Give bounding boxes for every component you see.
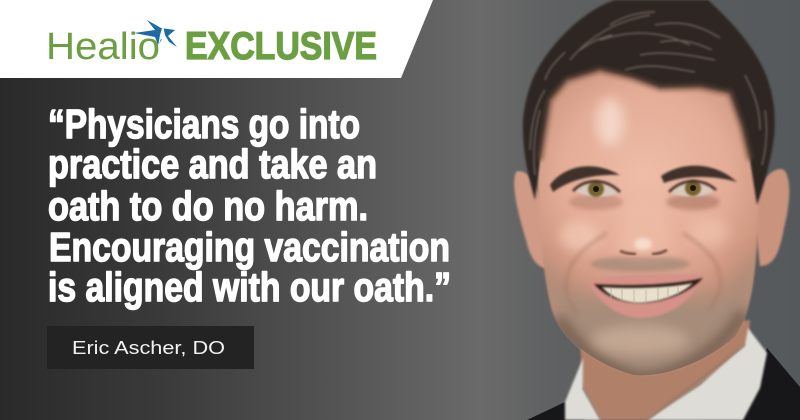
quote text: practice and take an	[48, 141, 377, 187]
shirt texture edge	[583, 345, 745, 420]
quote text: Encouraging vaccination	[49, 224, 450, 270]
white header banner	[0, 0, 433, 78]
quote text	[48, 101, 451, 310]
hair	[523, 0, 775, 205]
quote text: is aligned with our oath.”	[48, 264, 451, 310]
portrait photo of Eric Ascher	[514, 0, 800, 420]
quote text: “Physicians go into	[48, 101, 360, 147]
name plate: Eric Ascher, DO	[72, 337, 225, 358]
right ear	[752, 169, 789, 266]
left eye	[573, 181, 620, 197]
shirt collar	[565, 328, 767, 420]
Healio wordmark: Healio	[46, 26, 160, 68]
Healio logo	[46, 20, 177, 68]
smile lines	[566, 233, 721, 314]
hair highlights	[530, 12, 766, 175]
face	[538, 50, 759, 375]
star icon	[134, 20, 177, 47]
left ear	[514, 171, 550, 268]
facial shading and stubble	[540, 98, 765, 385]
tooth gaps	[611, 286, 678, 303]
left eyebrow	[550, 166, 620, 192]
neck	[580, 320, 750, 420]
right eyebrow	[661, 166, 737, 183]
hairline soft shadow	[540, 70, 750, 160]
smile mouth	[588, 274, 704, 318]
jacket	[527, 348, 800, 420]
right eye	[669, 180, 716, 197]
EXCLUSIVE label: EXCLUSIVE	[185, 25, 377, 68]
nose	[616, 200, 674, 256]
name plate	[47, 326, 254, 369]
quote text: oath to do no harm.	[48, 183, 368, 229]
